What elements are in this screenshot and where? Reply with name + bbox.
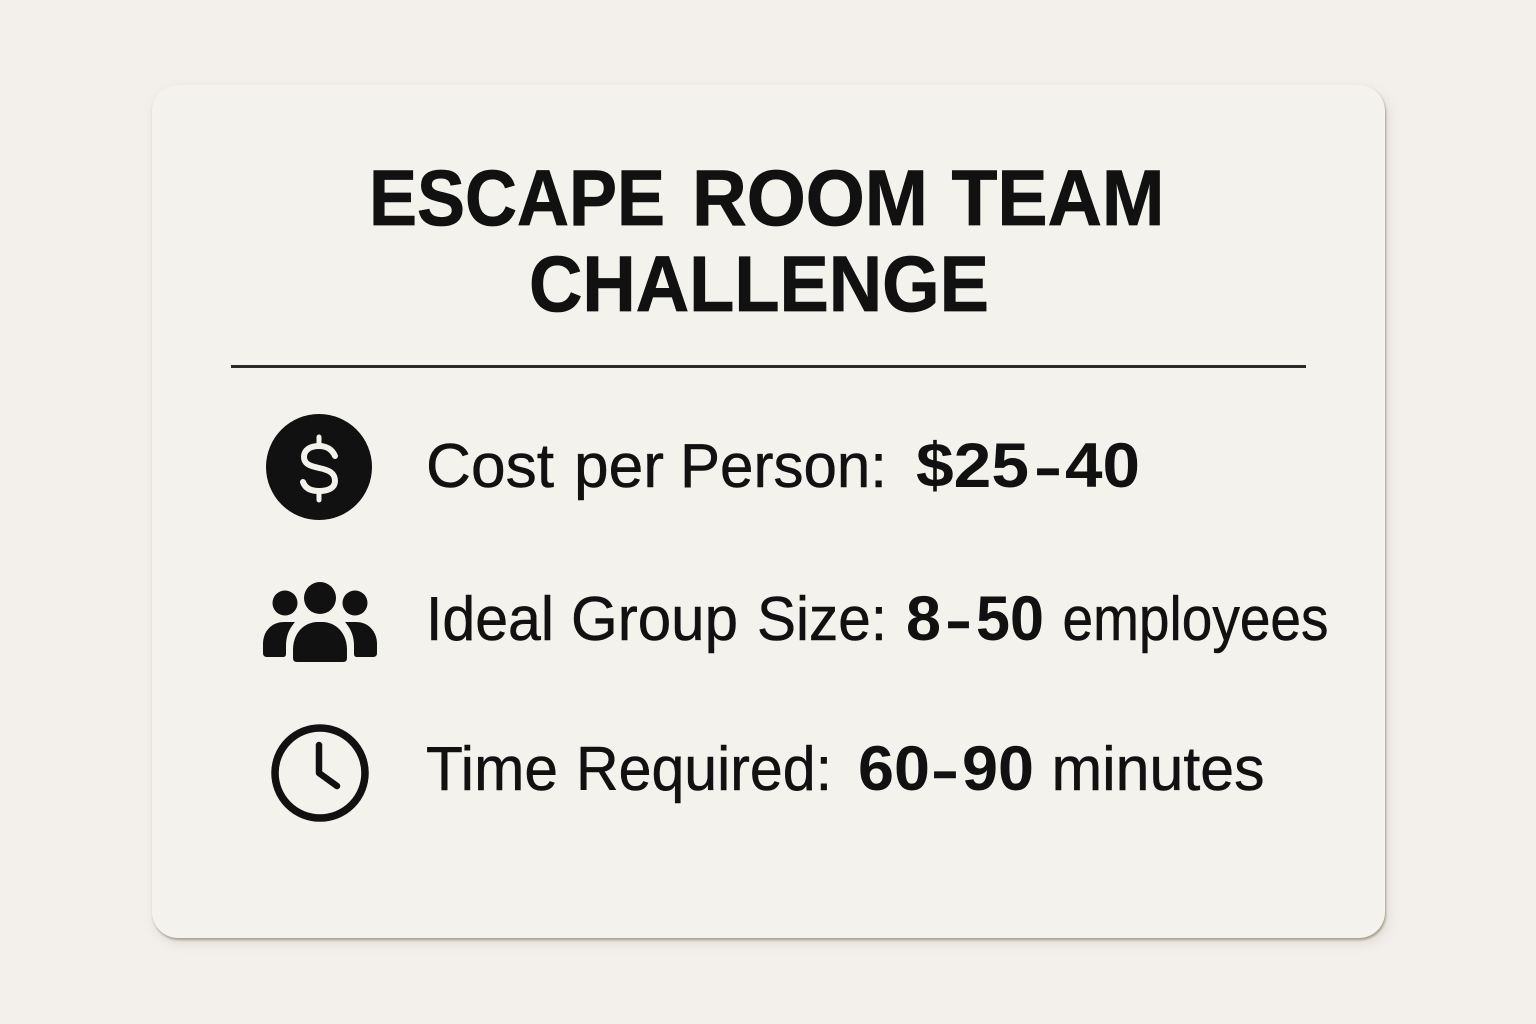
value: cost: [916, 431, 1140, 503]
unit: employees: employees: [1062, 585, 1328, 654]
unit: minutes: minutes: [1052, 735, 1264, 804]
row: group size: [263, 582, 1328, 662]
label: cost: per: [574, 432, 664, 501]
title: ESCAPE: [369, 153, 665, 242]
row: cost per person: [266, 414, 1140, 520]
label: group size: Group: [571, 585, 738, 654]
label: group size: [426, 585, 887, 654]
value: time: –: [933, 736, 957, 806]
value: group size: –: [947, 586, 970, 656]
value: time: 90: [962, 734, 1034, 804]
label: cost: [426, 432, 887, 501]
title: [369, 153, 1164, 328]
value: group size: 8: [906, 584, 941, 654]
title: CHALLENGE: [529, 239, 989, 328]
title: ROOM: [692, 153, 928, 242]
icon: clock: [275, 728, 365, 818]
label: group size: Size:: [757, 585, 887, 654]
icon: dollar coin: [266, 414, 372, 520]
value: cost: 40: [1065, 431, 1140, 501]
label: cost: Cost: [426, 432, 554, 501]
label: cost: Person:: [680, 432, 887, 501]
value: time: [858, 734, 1034, 806]
value: group size: [906, 584, 1044, 656]
value: group size: 50: [976, 584, 1044, 654]
label: time: Time: [426, 735, 558, 804]
value: cost: $25: [916, 431, 1029, 501]
label: time: [426, 735, 832, 804]
value: cost: –: [1036, 433, 1060, 503]
label: group size: Ideal: [426, 585, 554, 654]
title: TEAM: [952, 153, 1164, 242]
row: time required: [275, 728, 1264, 818]
panel: card: [152, 85, 1385, 938]
value: time: 60: [858, 734, 930, 804]
label: time: Required:: [576, 735, 832, 804]
icon: people: [263, 582, 377, 662]
